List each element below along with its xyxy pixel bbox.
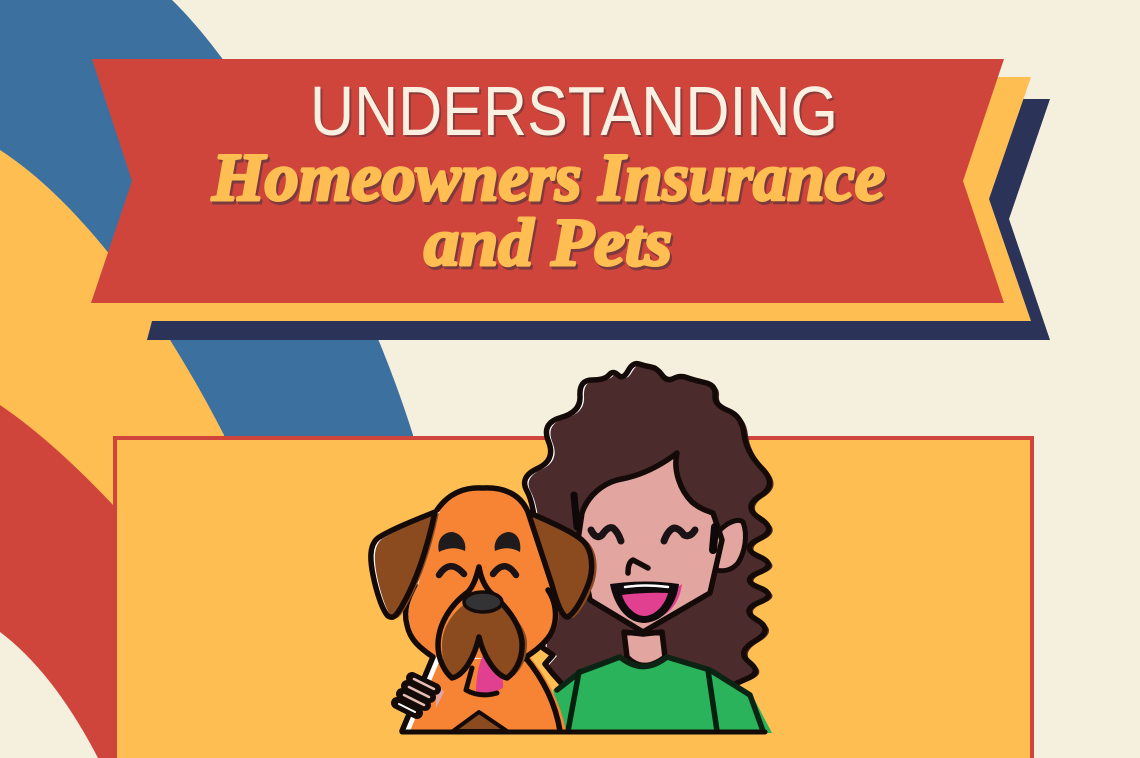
- ground line: [402, 730, 765, 734]
- retro arc: inner cream: [0, 632, 98, 758]
- woman neck: [624, 632, 665, 666]
- woman shirt: [553, 657, 772, 733]
- title: UNDERSTANDING: UNDERSTANDING: [310, 72, 838, 150]
- title banner: [91, 59, 1050, 340]
- banner layer: red: [91, 59, 1004, 303]
- dog nose: [464, 592, 502, 612]
- hand on dog: [397, 678, 444, 713]
- dog body: [402, 657, 566, 731]
- dog eyebrows: [438, 532, 520, 552]
- banner layer: yellow: [140, 77, 1031, 321]
- illustration: woman: [525, 364, 774, 733]
- woman face: [574, 453, 722, 632]
- woman mouth: [610, 582, 682, 623]
- dog tongue: [466, 647, 503, 695]
- retro arc: yellow: [0, 150, 224, 758]
- dog eyes: [439, 566, 516, 575]
- dog head: [406, 488, 558, 659]
- woman eyes: [591, 528, 695, 541]
- retro arc: red: [0, 405, 113, 758]
- dog muzzle: [438, 567, 527, 678]
- retro arc: blue: [0, 0, 413, 758]
- title: Homeowners Insurance: Homeowners Insurance: [211, 139, 885, 215]
- panel: illustration card: [115, 438, 1032, 758]
- banner layer: navy: [147, 99, 1050, 340]
- title: and Pets: and Pets: [424, 204, 672, 280]
- illustration: dog: [371, 488, 765, 732]
- dog right ear: [528, 512, 597, 618]
- woman hair: [525, 364, 774, 701]
- woman ear: [716, 520, 745, 571]
- dog left ear: [371, 512, 439, 618]
- woman nose: [628, 560, 648, 573]
